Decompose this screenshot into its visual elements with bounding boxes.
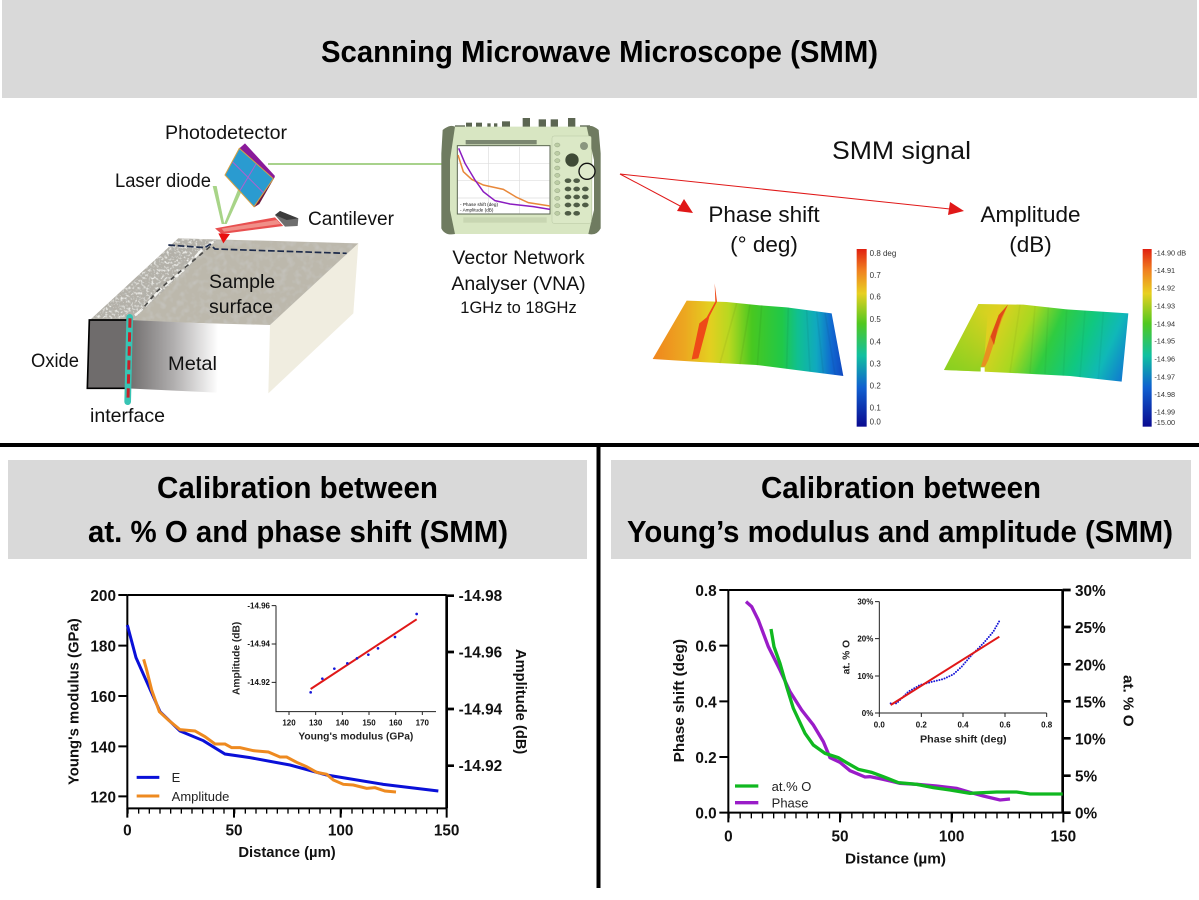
colour bar <box>1143 248 1186 427</box>
heading: amplitude: Amplitude <box>980 202 1081 227</box>
inset chart: oxygen vs phase shift: 30% <box>857 598 873 607</box>
axis tick labels: 5% <box>1075 769 1098 786</box>
arrow: to phase shift <box>620 174 693 213</box>
inset chart: oxygen vs phase shift: 10% <box>857 672 873 681</box>
label: photodetector: Photodetector <box>165 122 288 144</box>
axes <box>719 590 1071 822</box>
inset chart: amplitude vs Young's modulus: -14.94 <box>247 640 271 649</box>
axis titles: Distance (µm) <box>845 851 946 868</box>
panel: left heading: at. % O and phase shift (SMM) <box>88 514 508 549</box>
inset chart: oxygen vs phase shift: Phase shift (deg) <box>920 735 1007 746</box>
colour bar: 0.8 deg <box>870 249 896 258</box>
heading: phase shift: (° deg) <box>730 232 798 257</box>
colour bar: 0.3 <box>870 360 881 369</box>
sample block side face <box>268 243 358 393</box>
inset chart: amplitude vs Young's modulus: 150 <box>362 719 376 728</box>
icon: cantilever <box>215 211 298 243</box>
chart: phase shift surface <box>653 249 896 427</box>
heading: SMM signal: SMM signal <box>832 137 971 165</box>
axis tick labels: 100 <box>939 829 964 846</box>
surface plot <box>653 283 843 376</box>
colour bar <box>857 249 896 427</box>
label: interface: interface <box>90 405 165 427</box>
axis tick labels: 0.8 <box>695 583 717 600</box>
legend: at.% O <box>772 779 811 794</box>
inset chart: oxygen vs phase shift: 0.4 <box>957 721 969 730</box>
legend <box>137 770 229 804</box>
label: laser diode: Laser diode <box>115 170 211 192</box>
icon: vector network analyser: - Phase shift (deg) <box>460 202 498 207</box>
chart: amplitude surface <box>944 248 1186 427</box>
colour bar: 0.0 <box>870 418 881 427</box>
label: sample surface: surface <box>209 296 273 318</box>
legend: E <box>172 770 181 785</box>
icon: vector network analyser <box>441 118 601 234</box>
axis tick labels: 150 <box>434 823 459 840</box>
axis tick labels: 180 <box>90 639 116 656</box>
colour bar: 0.6 <box>870 293 881 302</box>
colour bar: -14.93 <box>1154 301 1175 310</box>
inset chart: oxygen vs phase shift: 0% <box>862 709 873 718</box>
inset chart: amplitude vs Young's modulus: 140 <box>336 719 350 728</box>
axis tick labels: 200 <box>90 588 116 605</box>
inset chart: amplitude vs Young's modulus: 160 <box>389 719 403 728</box>
axis tick labels: 160 <box>90 689 116 706</box>
metal face <box>127 320 220 393</box>
inset chart: oxygen vs phase shift: 0.2 <box>916 721 927 730</box>
axis tick labels: 0.4 <box>695 694 717 711</box>
colour bar: 0.5 <box>870 315 881 324</box>
label: vector network analyser: Analyser (VNA) <box>451 273 586 295</box>
axis titles: Phase shift (deg) <box>671 639 688 762</box>
colour bar: -14.91 <box>1154 266 1175 275</box>
colour bar: -15.00 <box>1154 418 1175 427</box>
line: phase <box>746 602 1010 800</box>
axis tick labels <box>695 583 1106 846</box>
colour bar: -14.90 dB <box>1154 248 1186 257</box>
axis tick labels: 120 <box>90 789 116 806</box>
axis tick labels: -14.92 <box>459 758 502 775</box>
chart: phase shift and oxygen vs distance <box>671 583 1136 868</box>
inset chart: oxygen vs phase shift: at. % O <box>841 640 852 674</box>
axis tick labels: 0 <box>123 823 132 840</box>
axis tick labels: 0.2 <box>695 750 717 767</box>
colour bar: 0.2 <box>870 382 881 391</box>
colour bar: -14.94 <box>1154 319 1175 328</box>
arrow: to amplitude <box>620 174 964 215</box>
axis tick labels: -14.94 <box>459 701 503 718</box>
inset chart: amplitude vs Young's modulus: Young's modulus (GPa) <box>298 731 413 742</box>
chart: Young's modulus and amplitude vs distance <box>65 588 529 861</box>
line: amplitude <box>144 659 396 792</box>
inset chart: oxygen vs phase shift: 0.0 <box>874 721 885 730</box>
axis tick labels: 0% <box>1075 806 1098 823</box>
axis tick labels: 140 <box>90 739 116 756</box>
line: oxygen <box>771 629 1063 794</box>
laser beams <box>213 175 248 224</box>
legend: Amplitude <box>172 789 229 804</box>
axis tick labels: 20% <box>1075 657 1106 674</box>
colour bar: 0.4 <box>870 338 881 347</box>
axis tick labels: 150 <box>1051 829 1076 846</box>
panel: right heading: Young’s modulus and amplitude (SMM) <box>627 514 1173 549</box>
axis titles: Amplitude (dB) <box>512 649 529 754</box>
inset chart: amplitude vs Young's modulus: -14.96 <box>247 601 271 610</box>
inset chart: oxygen vs phase shift: 0.6 <box>999 721 1011 730</box>
axis tick labels: 25% <box>1075 620 1106 637</box>
inset chart: amplitude vs Young's modulus: 170 <box>416 719 430 728</box>
axis tick labels: -14.96 <box>459 644 502 661</box>
axis tick labels: 100 <box>328 823 353 840</box>
axes <box>118 595 454 818</box>
label: oxide: Oxide <box>31 350 79 372</box>
inset chart: oxygen vs phase shift <box>841 598 1053 746</box>
heading: amplitude: (dB) <box>1009 232 1052 257</box>
axis tick labels: 0 <box>724 829 733 846</box>
panel: left heading <box>8 460 587 559</box>
axis titles: Distance (µm) <box>238 844 336 861</box>
interface marker <box>128 317 130 402</box>
colour bar: 0.7 <box>870 271 881 280</box>
colour bar: -14.97 <box>1154 372 1175 381</box>
axis tick labels: 15% <box>1075 694 1106 711</box>
line: E <box>127 625 438 791</box>
colour bar: -14.98 <box>1154 390 1175 399</box>
axis titles: at. % O <box>1119 675 1136 727</box>
colour bar: -14.99 <box>1154 408 1175 417</box>
colour bar: -14.95 <box>1154 337 1175 346</box>
colour bar: -14.96 <box>1154 354 1175 363</box>
oxide face <box>87 320 128 388</box>
axis tick labels <box>90 588 503 840</box>
axis titles <box>65 618 529 861</box>
colour bar: -14.92 <box>1154 283 1175 292</box>
inset chart: oxygen vs phase shift: 20% <box>857 635 873 644</box>
axis tick labels: 10% <box>1075 731 1106 748</box>
title: Scanning Microwave Microscope (SMM) <box>321 34 878 69</box>
legend <box>735 779 811 811</box>
inset chart: oxygen vs phase shift: 0.8 <box>1041 721 1053 730</box>
inset chart: amplitude vs Young's modulus <box>231 601 436 742</box>
panel: right heading: Calibration between <box>761 470 1041 505</box>
icon: photodetector <box>225 143 275 207</box>
axis tick labels: 50 <box>225 823 243 840</box>
panel: title banner <box>2 0 1197 98</box>
axis tick labels: 0.6 <box>695 639 717 656</box>
connector: photodetector to VNA <box>268 163 443 165</box>
surface plot <box>944 304 1128 382</box>
inset chart: amplitude vs Young's modulus: 120 <box>282 719 296 728</box>
label: sample surface: Sample <box>209 271 275 293</box>
scan line <box>168 244 347 253</box>
inset chart: amplitude vs Young's modulus: 130 <box>309 719 323 728</box>
axis tick labels: -14.98 <box>459 588 503 605</box>
colour bar: 0.1 <box>870 404 881 413</box>
inset chart: amplitude vs Young's modulus: Amplitude (dB) <box>231 622 242 695</box>
inset chart: amplitude vs Young's modulus: -14.92 <box>247 678 271 687</box>
panel: sample and probe schematic <box>87 143 358 402</box>
label: vector network analyser: 1GHz to 18GHz <box>460 299 577 317</box>
label: cantilever: Cantilever <box>308 208 394 230</box>
axis titles: Young's modulus (GPa) <box>65 618 82 785</box>
label: metal: Metal <box>168 353 217 375</box>
icon: vector network analyser: - Amplitude (dB) <box>460 208 494 213</box>
panel: left heading: Calibration between <box>157 470 438 505</box>
axis tick labels: 50 <box>831 829 849 846</box>
axis tick labels: 30% <box>1075 583 1106 600</box>
legend: Phase <box>772 796 808 811</box>
panel: right heading <box>611 460 1191 559</box>
label: vector network analyser: Vector Network <box>452 247 585 269</box>
axis tick labels: 0.0 <box>695 806 717 823</box>
heading: phase shift: Phase shift <box>708 202 820 227</box>
axis titles <box>671 639 1136 868</box>
sample surface <box>90 238 358 325</box>
